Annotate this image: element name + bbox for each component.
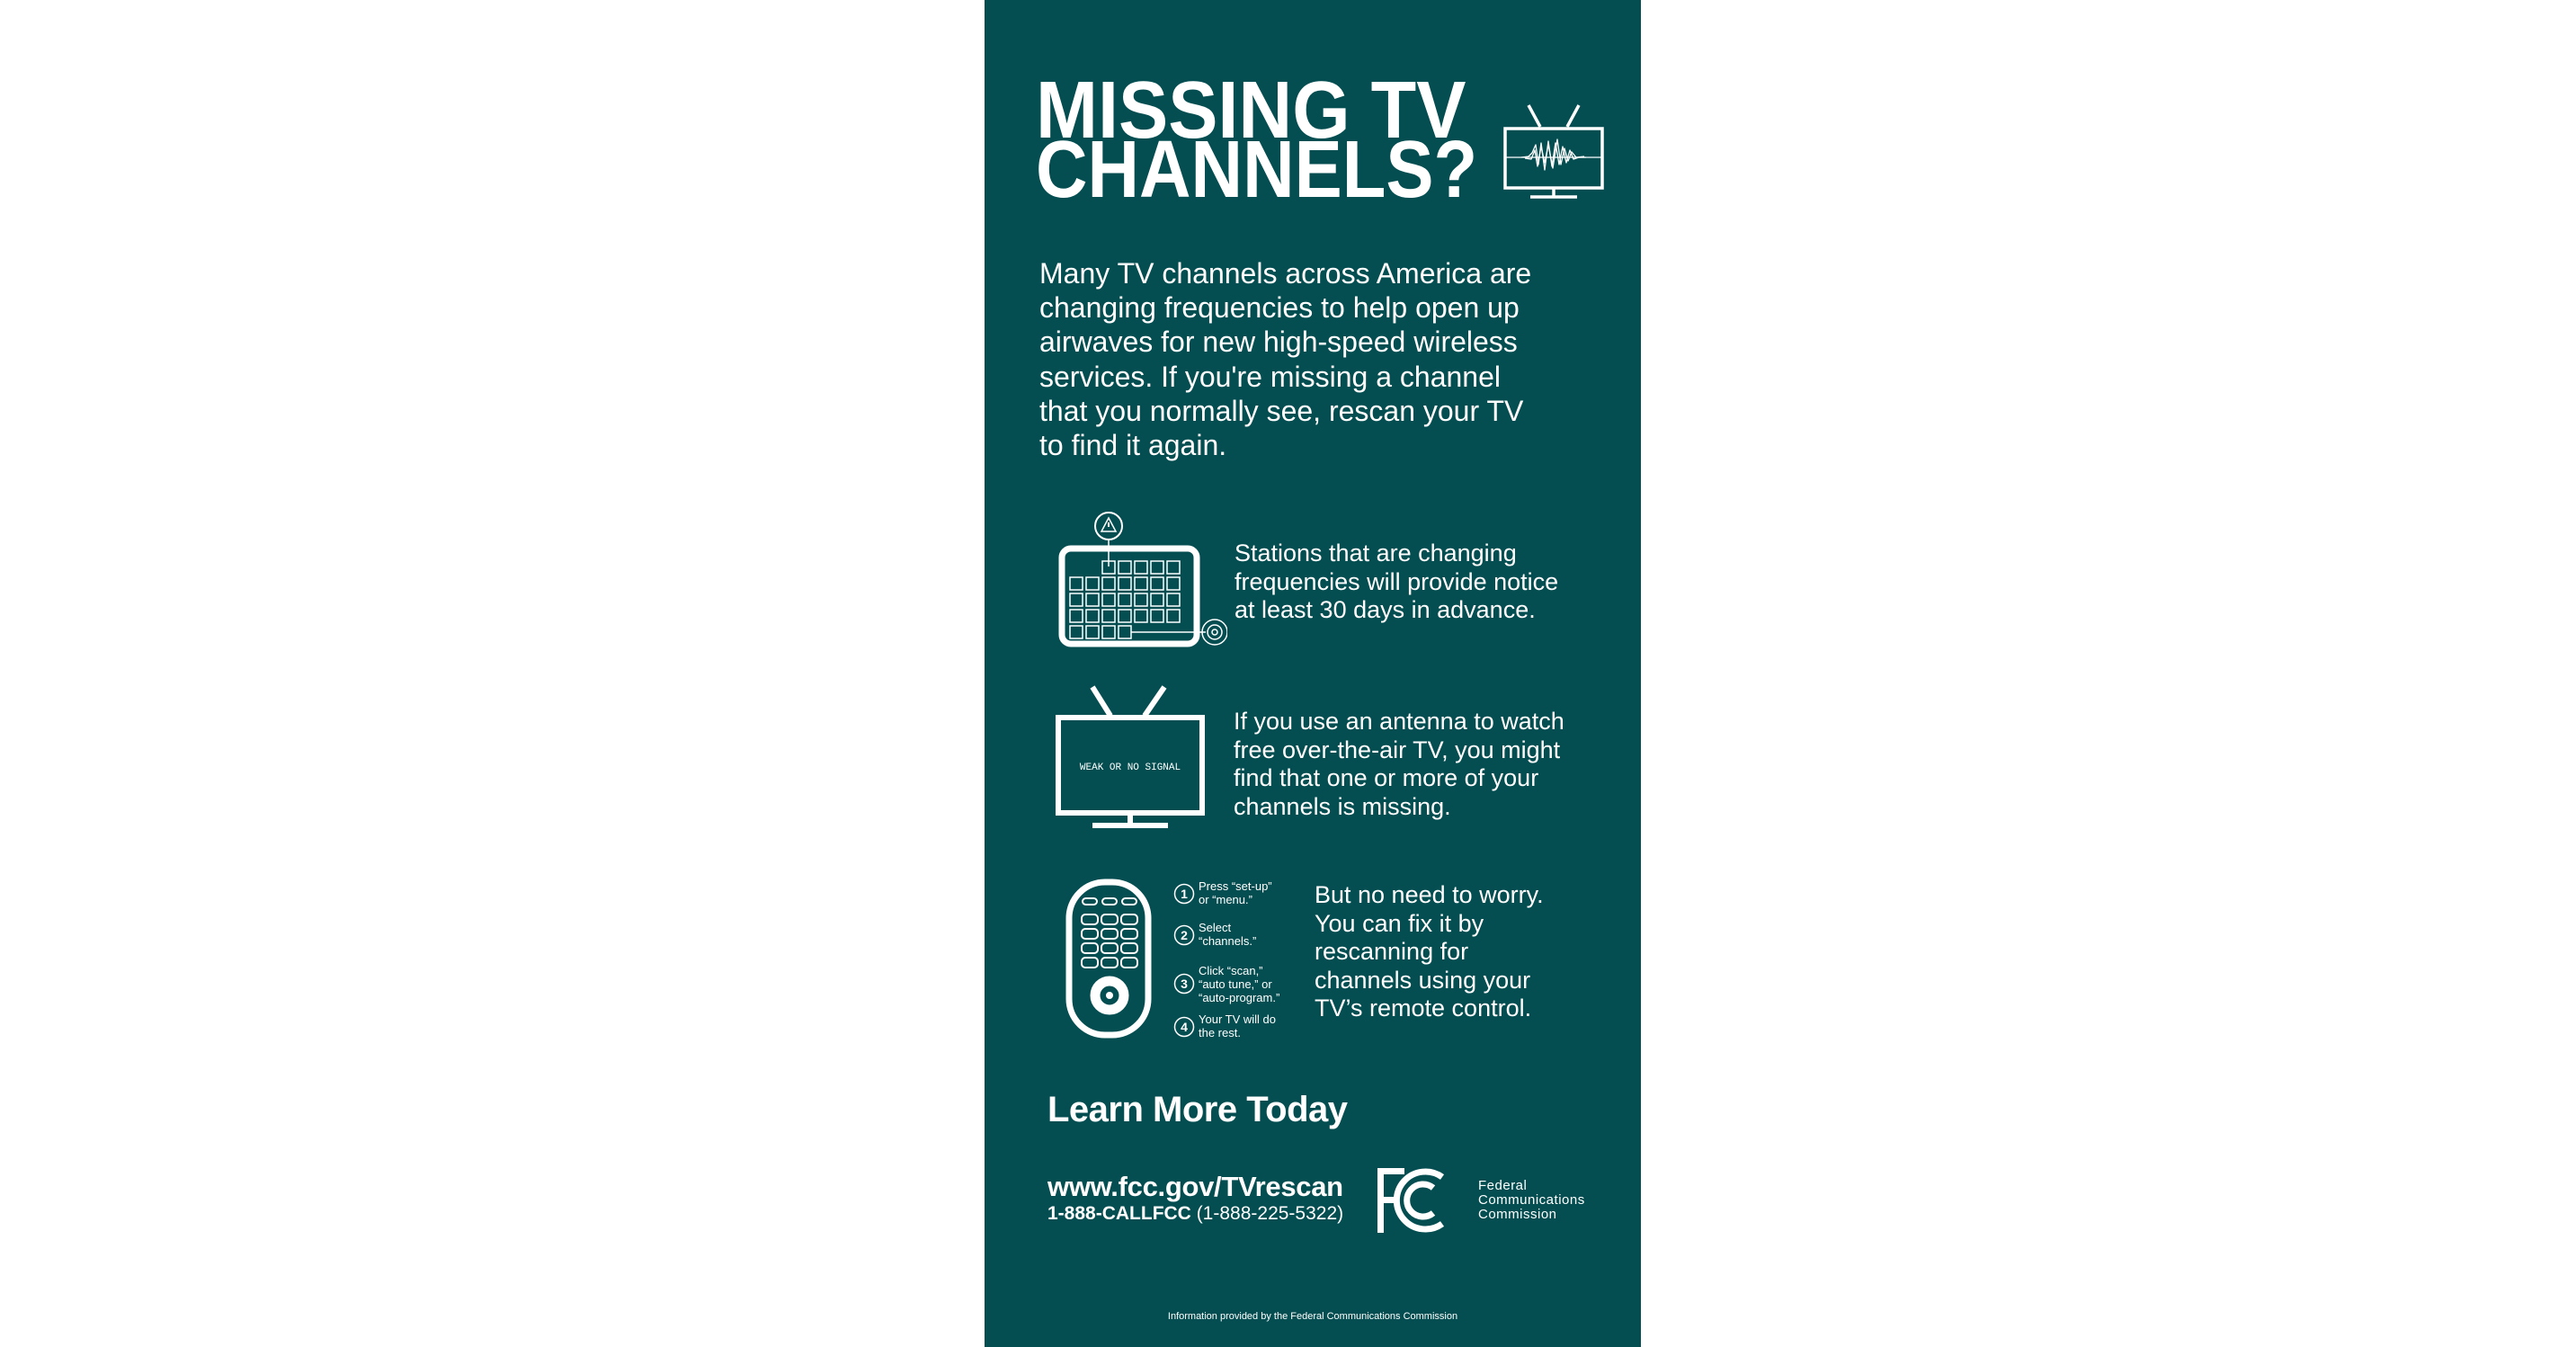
text block: rescan fix: TV’s remote control. — [1315, 995, 1531, 1021]
steps list: Press “set-up” — [1199, 879, 1272, 893]
text block: rescan fix: channels using your — [1315, 966, 1530, 993]
title: MISSING TV — [1036, 66, 1466, 156]
heading: learn more today: Learn More Today — [1047, 1090, 1348, 1129]
icon: tv weak signal — [1056, 685, 1205, 828]
panel: main infographic — [985, 0, 1641, 1347]
icon: tv with signal wave — [1503, 104, 1604, 199]
step 3 — [1174, 964, 1279, 1004]
title — [1036, 66, 1477, 215]
text block: rescan fix: rescanning for — [1315, 938, 1468, 965]
title: CHANNELS? — [1036, 125, 1477, 215]
text block: antenna missing channels — [1234, 708, 1564, 820]
step 4 — [1174, 1012, 1276, 1039]
steps list — [1174, 879, 1279, 1039]
logo text: Federal Communications Commission — [1478, 1178, 1585, 1222]
contact info: 1-888-CALLFCC (1-888-225-5322) — [1047, 1203, 1343, 1224]
text block: rescan fix: But no need to worry. — [1315, 881, 1544, 908]
step 1 — [1174, 879, 1272, 906]
steps list: or “menu.” — [1199, 893, 1252, 906]
steps list: “auto tune,” or — [1199, 977, 1272, 991]
logo text: Federal Communications Commission: Communications — [1478, 1192, 1585, 1208]
footer credit: Information provided by the Federal Communications Commission — [1168, 1311, 1457, 1322]
step 2 — [1174, 921, 1256, 948]
text block: intro paragraph: that you normally see, rescan your TV — [1039, 395, 1523, 427]
text block: rescan fix: You can fix it by — [1315, 910, 1484, 937]
logo text: Federal Communications Commission: Federal — [1478, 1178, 1527, 1193]
text block: intro paragraph: services. If you're missing a channel — [1039, 361, 1501, 393]
text block: intro paragraph: changing frequencies to help open up — [1039, 291, 1520, 324]
steps list: “channels.” — [1199, 934, 1256, 948]
text block: intro paragraph: to find it again. — [1039, 429, 1226, 461]
steps list: 4 — [1181, 1020, 1188, 1034]
text block: stations notice — [1235, 540, 1558, 623]
text block: stations notice: frequencies will provide notice — [1235, 568, 1558, 595]
text block: antenna missing channels: find that one or more of your — [1234, 764, 1538, 791]
text block: antenna missing channels: channels is missing. — [1234, 793, 1451, 820]
logo: FCC — [1377, 1168, 1444, 1233]
text block: rescan fix — [1315, 881, 1544, 1021]
steps list: 3 — [1181, 977, 1188, 991]
icon: tv weak signal: WEAK OR NO SIGNAL — [1080, 763, 1181, 773]
text block: intro paragraph — [1039, 257, 1531, 461]
text block: stations notice: Stations that are changing — [1235, 540, 1517, 566]
text block: antenna missing channels: If you use an antenna to watch — [1234, 708, 1564, 735]
steps list: 1 — [1181, 887, 1188, 901]
text block: intro paragraph: airwaves for new high-speed wireless — [1039, 326, 1518, 358]
panel: main infographic: the rest. — [1199, 1026, 1241, 1039]
steps list: Your TV will do — [1199, 1012, 1276, 1026]
contact info: www.fcc.gov/TVrescan — [1047, 1171, 1343, 1202]
text block: stations notice: at least 30 days in advance. — [1235, 596, 1536, 623]
text block: intro paragraph: Many TV channels across America are — [1039, 257, 1531, 290]
steps list: Select — [1199, 921, 1231, 934]
steps list: Click “scan,” — [1199, 964, 1263, 977]
icon: remote control — [1066, 879, 1151, 1038]
steps list: “auto-program.” — [1199, 991, 1279, 1004]
text block: antenna missing channels: free over-the-air TV, you might — [1234, 736, 1560, 763]
icon: calendar with alerts — [1059, 512, 1227, 647]
contact info — [1047, 1171, 1343, 1224]
steps list: 2 — [1181, 928, 1188, 942]
logo text: Federal Communications Commission: Commission — [1478, 1207, 1557, 1222]
